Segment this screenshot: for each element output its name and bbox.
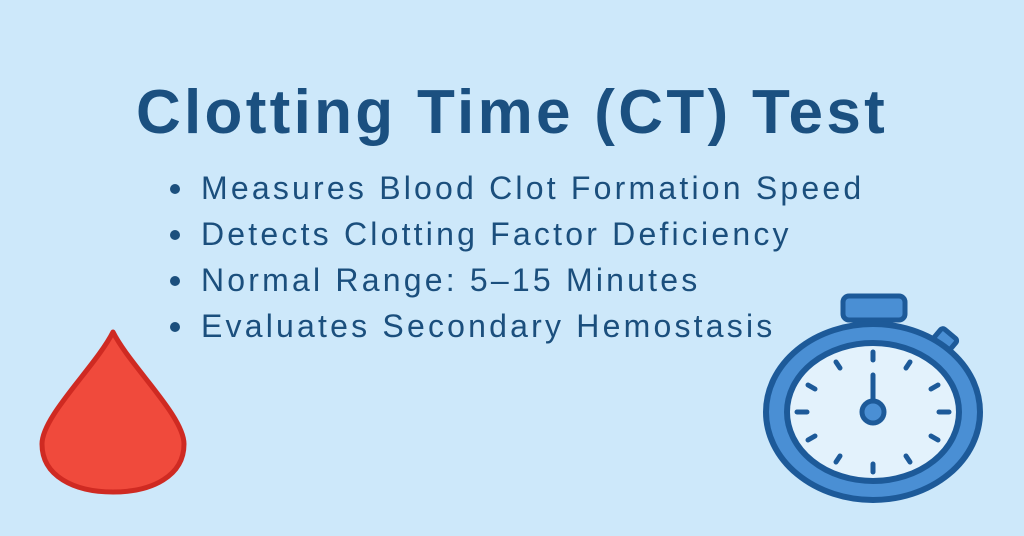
icon: stopwatch	[763, 294, 983, 503]
bullet list: Detects Clotting Factor Deficiency	[201, 216, 792, 252]
bullet list: Normal Range: 5–15 Minutes	[201, 262, 700, 298]
bullet list	[170, 170, 864, 344]
bullet list: Evaluates Secondary Hemostasis	[201, 308, 775, 344]
title: Clotting Time (CT) Test	[136, 78, 888, 147]
icon: blood drop	[40, 330, 186, 494]
bullet list: Measures Blood Clot Formation Speed	[201, 170, 864, 206]
